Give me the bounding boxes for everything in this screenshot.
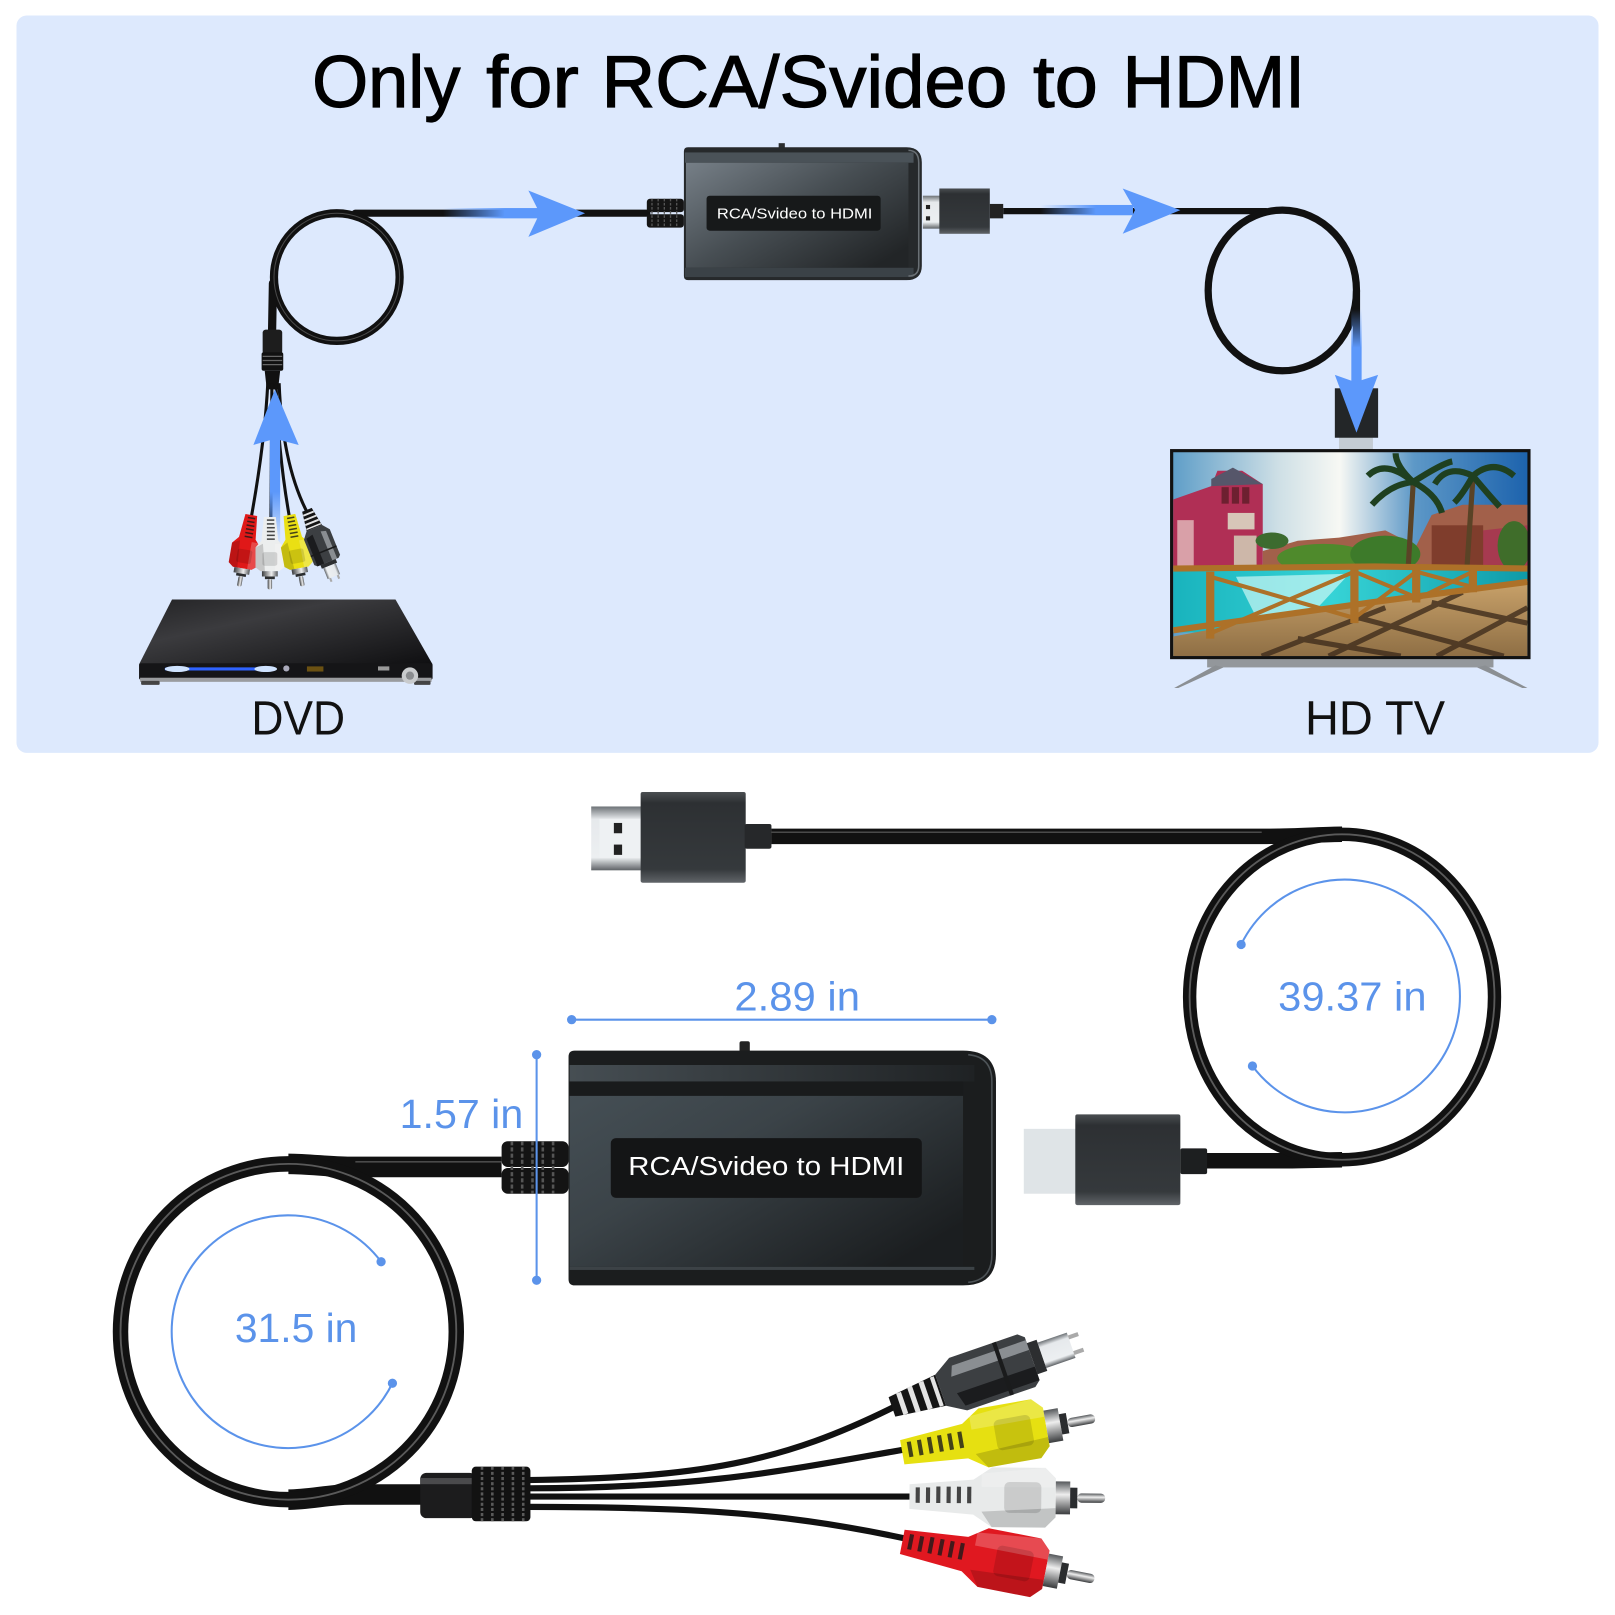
panel: usage diagram background bbox=[16, 15, 1599, 753]
icon: right arrow on HDMI cable bbox=[1040, 188, 1180, 234]
usage: red plug bbox=[225, 513, 265, 589]
product: HDMI plug, top bbox=[591, 792, 771, 883]
usage: cable junction bbox=[262, 330, 283, 389]
dimension: 2.89 in width: 2.89 in bbox=[734, 973, 860, 1019]
usage: HDMI plug into TV bbox=[1335, 388, 1378, 450]
dimension: 39.37 in cable: 39.37 in bbox=[1278, 973, 1427, 1019]
nameplate bbox=[611, 1138, 922, 1198]
dimension: 39.37 in cable bbox=[1236, 880, 1460, 1112]
converter: usage view bbox=[647, 143, 922, 280]
converter: usage view: RCA/Svideo to HDMI bbox=[717, 205, 872, 222]
icon: up arrow on RCA cables bbox=[253, 389, 299, 546]
dimension: 1.57 in height bbox=[400, 1050, 541, 1285]
icon: down arrow on HDMI cable bbox=[1335, 309, 1378, 433]
product: 39.37 in cable loop bbox=[771, 832, 1494, 1161]
product: four split cables bbox=[527, 1406, 915, 1539]
title: to bbox=[1033, 42, 1098, 123]
converter: product view bbox=[502, 1041, 996, 1285]
usage: input cable loop bbox=[272, 213, 647, 341]
title: for bbox=[486, 42, 579, 123]
product: 31.5 in cable loop bbox=[121, 1162, 502, 1500]
nameplate: RCA/Svideo to HDMI bbox=[628, 1153, 904, 1181]
title: RCA/Svideo bbox=[602, 42, 1007, 123]
usage: output cable loop bbox=[1003, 210, 1356, 389]
product: HDMI plug, bottom bbox=[1024, 1114, 1207, 1205]
icon: DVD player bbox=[139, 599, 433, 685]
TV picture: resort and pool bbox=[1173, 452, 1531, 656]
dimension: 1.57 in height: 1.57 in bbox=[400, 1091, 523, 1137]
product: cable junction bbox=[420, 1467, 530, 1521]
TV stand bbox=[1174, 659, 1527, 688]
product: red plug bbox=[897, 1513, 1100, 1609]
product: yellow plug bbox=[897, 1389, 1100, 1482]
label: HD TV: HD TV bbox=[1305, 691, 1446, 745]
product: S-video plug bbox=[883, 1316, 1090, 1433]
icon: right arrow on input cable bbox=[443, 191, 585, 237]
label: DVD: DVD bbox=[251, 691, 345, 745]
dimension: 31.5 in cable bbox=[172, 1215, 397, 1448]
title bbox=[312, 42, 1305, 123]
title: Only bbox=[312, 42, 461, 123]
title: HDMI bbox=[1123, 42, 1305, 123]
usage: yellow plug bbox=[275, 512, 317, 589]
dimension: 31.5 in cable: 31.5 in bbox=[235, 1305, 357, 1351]
usage: S-video plug bbox=[294, 505, 348, 585]
usage: white plug bbox=[256, 517, 284, 589]
icon: TV bbox=[1170, 449, 1531, 688]
dimension: 2.89 in width bbox=[567, 973, 997, 1024]
usage: HDMI plug on converter bbox=[923, 188, 1003, 234]
usage: four split cables bbox=[251, 383, 307, 519]
product: white plug bbox=[909, 1467, 1105, 1528]
